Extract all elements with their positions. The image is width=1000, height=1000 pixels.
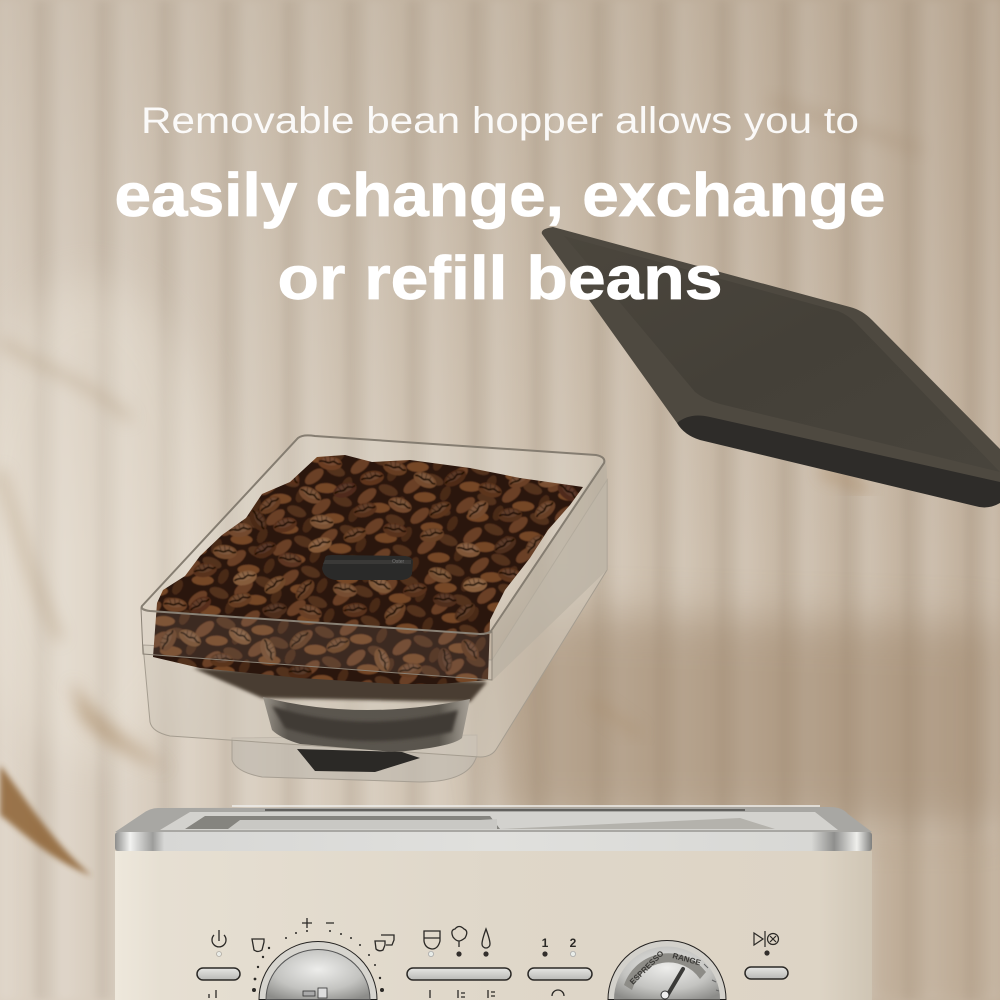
icon: double cup xyxy=(375,935,394,951)
selector LEDs xyxy=(428,950,770,957)
hopper back interior xyxy=(142,435,604,631)
title: headline line 2: or refill beans xyxy=(278,244,722,312)
plus and minus labels xyxy=(302,918,334,928)
hopper front wall xyxy=(141,608,492,680)
hopper handle xyxy=(322,555,413,580)
dial ticks xyxy=(252,930,384,992)
lid inner panel xyxy=(564,236,1000,472)
hopper handle: Oster xyxy=(392,559,405,565)
hopper rim xyxy=(142,435,604,634)
icon: play and stop xyxy=(754,931,778,947)
hopper right wall xyxy=(492,458,607,680)
lid: dark hopper lid xyxy=(542,227,1000,507)
start button xyxy=(745,967,788,979)
shot number 1: 1 xyxy=(542,936,549,950)
machine top tray xyxy=(115,806,872,832)
coffee machine xyxy=(115,806,872,1000)
brew dial xyxy=(259,942,377,1000)
hopper clear lower shell xyxy=(143,480,607,757)
title: intro line: Removable bean hopper allows you to xyxy=(141,100,859,141)
coffee beans xyxy=(153,455,583,684)
machine chrome band xyxy=(115,832,872,851)
title: headline line 1: easily change, exchange xyxy=(114,161,886,229)
icon: power xyxy=(212,930,226,947)
shot button xyxy=(528,968,592,980)
bean hopper xyxy=(140,435,607,782)
left control group xyxy=(197,918,394,998)
power button xyxy=(197,968,240,980)
pressure gauge: ESPRESSO xyxy=(628,949,666,986)
shot number 2: 2 xyxy=(570,936,577,950)
lid rim xyxy=(542,227,1000,488)
pressure gauge: RANGE xyxy=(671,951,702,968)
drink selector icons xyxy=(424,926,490,949)
lower drink icons xyxy=(430,990,564,998)
power LED xyxy=(216,952,222,956)
icon: single cup xyxy=(252,939,264,952)
pressure gauge xyxy=(608,940,726,1000)
hopper funnel xyxy=(193,668,487,772)
hopper base cup xyxy=(232,735,477,782)
machine body xyxy=(115,851,872,1000)
lid underside edge xyxy=(677,415,1000,507)
icon: bottom-left water xyxy=(209,990,216,998)
selector button xyxy=(407,968,511,980)
